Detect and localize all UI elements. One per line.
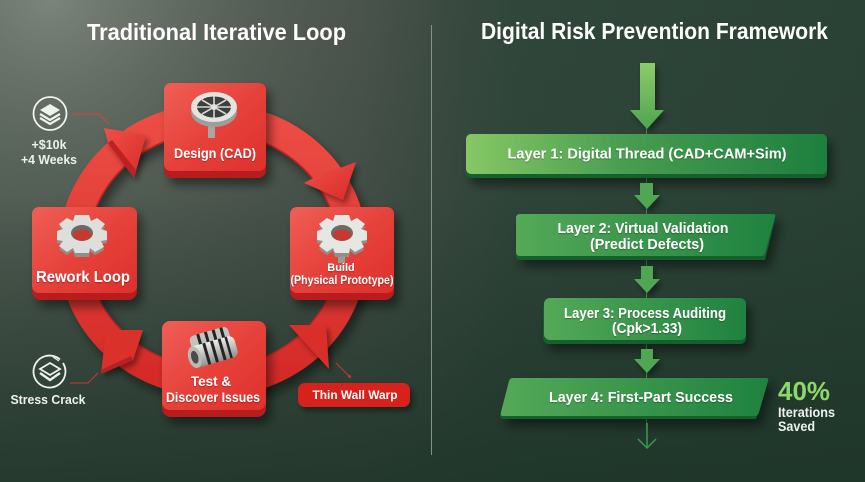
stat: 40% iterations saved: Iterations	[778, 405, 835, 420]
label: Layer 1: Layer 1: Digital Thread (CAD+CAM+Sim)	[508, 146, 787, 162]
icon: wheel	[191, 92, 237, 138]
arrow: layer 3 to layer 4	[634, 349, 660, 373]
connecting thread	[646, 128, 647, 428]
label: Build (Physical Prototype): Build	[327, 262, 355, 274]
node: Rework Loop	[32, 207, 137, 300]
label: Design (CAD): Design (CAD)	[174, 146, 256, 161]
label: Rework Loop: Rework Loop	[36, 269, 130, 286]
callout: Stress Crack	[10, 356, 98, 407]
stat: 40% iterations saved	[778, 376, 835, 434]
arrow: exit	[638, 423, 656, 448]
layer 1	[466, 134, 827, 178]
node: Build (Physical Prototype)	[290, 207, 394, 300]
leader line	[70, 373, 98, 383]
arrow: design to build	[304, 162, 356, 200]
label: Test & Discover Issues: Discover Issues	[166, 390, 260, 405]
label: Layer 3: Layer 3: Process Auditing	[564, 306, 726, 322]
red ring	[73, 118, 353, 382]
label: Layer 2: (Predict Defects)	[590, 237, 704, 253]
label: Test & Discover Issues: Test &	[191, 374, 231, 389]
centre divider	[431, 25, 432, 455]
label: Test & Discover Issues	[166, 374, 260, 405]
arrow: layer 2 to layer 3	[634, 266, 660, 293]
label: Thin Wall Warp: Thin Wall Warp	[312, 388, 398, 402]
label: Layer 3: (Cpk>1.33)	[612, 321, 682, 337]
panel: traditional iterative loop	[10, 83, 410, 417]
title: Digital Risk Prevention Framework: Digital Risk Prevention Framework	[481, 18, 828, 44]
label: Layer 2	[558, 221, 728, 253]
label: Stress Crack: Stress Crack	[10, 392, 86, 407]
leader line	[73, 114, 109, 124]
label: Layer 3	[564, 306, 726, 337]
icon: gear	[57, 215, 107, 257]
icon: gear with shaft	[317, 215, 367, 263]
arrow: test to rework	[101, 330, 143, 374]
label: cost and delay	[21, 138, 77, 167]
layer 2	[516, 214, 775, 260]
label: Build (Physical Prototype): (Physical Prototype)	[290, 275, 394, 287]
label: Layer 2: Layer 2: Virtual Validation	[558, 221, 728, 237]
arrow: entry	[630, 63, 664, 129]
node: Design (CAD)	[164, 83, 266, 178]
callout: Thin Wall Warp	[298, 363, 410, 407]
label: Layer 4: Layer 4: First-Part Success	[549, 390, 733, 406]
node: Test & Discover Issues	[162, 321, 266, 417]
layer 3	[543, 298, 746, 344]
stat: 40% iterations saved: Saved	[778, 419, 815, 434]
title: Traditional Iterative Loop: Traditional Iterative Loop	[87, 19, 346, 45]
label: Build (Physical Prototype)	[290, 262, 394, 287]
arrow: layer 1 to layer 2	[634, 183, 660, 209]
arrow: build to test	[289, 325, 329, 369]
icon: cracked layers	[33, 356, 65, 388]
stat: 40% iterations saved: 40%	[778, 376, 830, 406]
icon: metal cylinders	[185, 326, 239, 370]
callout: +$10k +4 Weeks	[21, 97, 109, 167]
label: cost and delay: +$10k	[31, 138, 67, 152]
arrow: rework to design	[104, 128, 146, 178]
label: cost and delay: +4 Weeks	[21, 153, 77, 167]
panel: digital risk prevention framework	[466, 63, 835, 448]
icon: stacked layers	[34, 97, 66, 130]
layer 4	[500, 378, 768, 419]
